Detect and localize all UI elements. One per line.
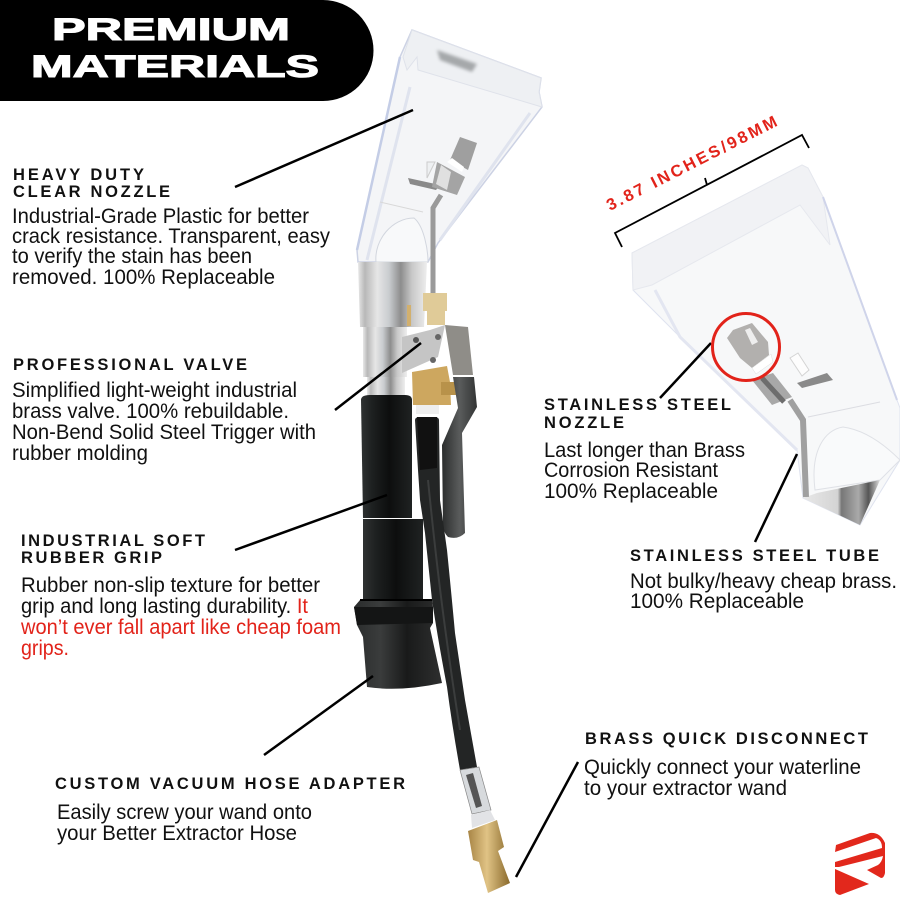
callout: professional valve: Simplified light-weight industrial (12, 379, 297, 402)
callout: custom vacuum hose adapter (55, 676, 405, 845)
callout: custom vacuum hose adapter: your Better Extractor Hose (57, 822, 297, 845)
vacuum adapter (354, 600, 442, 689)
callout: industrial soft rubber grip: RUBBER GRIP (21, 549, 162, 567)
dimension bracket: nozzle width: 3.87 INCHES/98MM (604, 113, 780, 215)
callout: heavy duty clear nozzle: to verify the stain has been (12, 245, 252, 268)
title banner: PREMIUM (52, 11, 290, 47)
callout: professional valve: PROFESSIONAL VALVE (13, 356, 247, 374)
brass valve (402, 293, 456, 414)
callout: brass quick disconnect: to your extractor wand (584, 777, 787, 800)
brass quick disconnect (468, 820, 510, 893)
callout: custom vacuum hose adapter: CUSTOM VACUUM HOSE ADAPTER (55, 775, 405, 793)
callout: heavy duty clear nozzle (12, 110, 413, 289)
callout: brass quick disconnect: Quickly connect your waterline (584, 756, 861, 779)
callout: industrial soft rubber grip: Rubber non-slip texture for better (21, 574, 320, 597)
silver tube (358, 262, 427, 327)
collar (363, 327, 407, 377)
callout: stainless steel nozzle: STAINLESS STEEL (544, 396, 731, 414)
clear nozzle head (357, 30, 542, 262)
rubber grip (361, 395, 412, 518)
callout: heavy duty clear nozzle: removed. 100% Replaceable (12, 266, 275, 289)
callout: professional valve: Non-Bend Solid Steel Trigger with (12, 421, 316, 444)
spray tube and tip (408, 137, 477, 295)
callout: stainless steel nozzle: 100% Replaceable (544, 480, 718, 503)
callout: custom vacuum hose adapter: Easily screw your wand onto (57, 801, 312, 824)
callout: heavy duty clear nozzle: HEAVY DUTY (13, 166, 144, 184)
product photo: extractor wand (354, 30, 542, 893)
dimension bracket: nozzle width (604, 113, 809, 247)
callout: brass quick disconnect: BRASS QUICK DISCONNECT (585, 730, 868, 748)
title banner (0, 0, 374, 101)
callout: heavy duty clear nozzle: Industrial-Grade Plastic for better (12, 205, 309, 228)
callout: stainless steel tube: STAINLESS STEEL TUBE (630, 547, 879, 565)
icon: brand logo (835, 833, 885, 895)
callout: brass quick disconnect (516, 730, 868, 877)
lower grip (363, 519, 423, 602)
nozzle close-up photo (632, 165, 900, 525)
callout: professional valve: rubber molding (12, 442, 148, 465)
callout: stainless steel nozzle (544, 314, 780, 503)
callout: stainless steel tube: Not bulky/heavy cheap brass. (630, 570, 897, 593)
callout: industrial soft rubber grip: grips. (21, 637, 69, 660)
title banner: MATERIALS (31, 48, 319, 84)
callout: stainless steel tube (630, 454, 897, 613)
callout: stainless steel nozzle: NOZZLE (544, 414, 624, 432)
callout: industrial soft rubber grip (20, 495, 387, 660)
water hose (415, 417, 495, 828)
callout: professional valve (12, 343, 421, 465)
callout: heavy duty clear nozzle: CLEAR NOZZLE (13, 183, 170, 201)
trigger lever (442, 325, 477, 538)
callout: industrial soft rubber grip: INDUSTRIAL SOFT (21, 532, 205, 550)
callout: industrial soft rubber grip: won’t ever fall apart like cheap foam (20, 616, 341, 639)
callout: stainless steel tube: 100% Replaceable (630, 590, 804, 613)
callout: heavy duty clear nozzle: crack resistance. Transparent, easy (12, 225, 330, 248)
callout: professional valve: brass valve. 100% rebuildable. (12, 400, 289, 423)
callout: industrial soft rubber grip: grip and long lasting durability. It (21, 595, 308, 618)
callout: stainless steel nozzle: Last longer than Brass (544, 439, 745, 462)
callout: stainless steel nozzle: Corrosion Resistant (544, 459, 718, 482)
